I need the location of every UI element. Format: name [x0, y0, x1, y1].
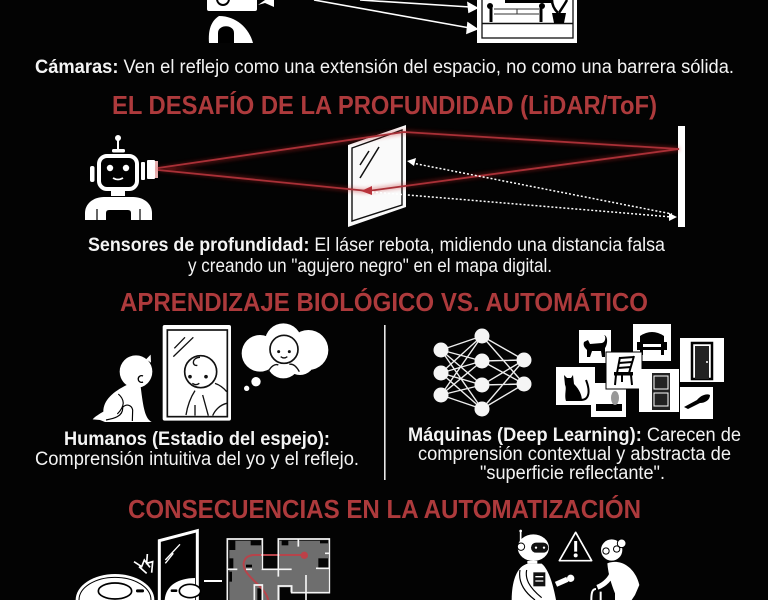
- text: cameras: Cámaras: Ven el reflejo como una extensión del espacio, no como una barrera sólida.: [35, 57, 734, 78]
- icon: mirror with baby reflection: [163, 325, 231, 421]
- icon: lidar robot: [85, 135, 158, 220]
- card: keys: [680, 387, 713, 419]
- dash between vacuum and map: [204, 580, 222, 582]
- card: chair: [606, 352, 642, 389]
- icon: thought cloud with baby: [242, 323, 328, 391]
- icon: floor map with black hole: [227, 539, 329, 600]
- icon: crawling baby: [93, 355, 152, 422]
- card: door: [680, 338, 724, 382]
- icon: robot vacuum hitting mirror: [76, 531, 201, 600]
- card: door panelled: [639, 369, 679, 412]
- icon: labelled training images: [556, 324, 724, 419]
- heading: consequences in automation: CONSECUENCIAS EN LA AUTOMATIZACIÓN: [128, 494, 641, 524]
- panel: cameras: [35, 0, 734, 78]
- elderly person: [591, 539, 639, 600]
- icon: neural network: [434, 328, 532, 416]
- text: humans: [35, 429, 359, 470]
- text: machines: Máquinas (Deep Learning): Carecen de: [408, 425, 741, 446]
- panel: consequences: [76, 530, 639, 600]
- icon: mirror: [348, 125, 406, 227]
- text: depth sensors: Sensores de profundidad: El láser rebota, midiendo una distancia falsa: [88, 235, 665, 256]
- text: machines: [408, 425, 741, 484]
- card: armchair: [633, 324, 671, 361]
- wall: [678, 126, 685, 227]
- heading: depth challenge: EL DESAFÍO DE LA PROFUNDIDAD (LiDAR/ToF): [112, 90, 657, 120]
- text: machines: comprensión contextual y abstracta de: [418, 444, 731, 465]
- icon: camera robot: [207, 0, 274, 43]
- red laser path: [158, 132, 679, 195]
- card: toy: [591, 383, 626, 417]
- panel: humans: [35, 323, 359, 470]
- text: depth sensors: y creando un "agujero negro" en el mapa digital.: [188, 256, 552, 277]
- heading: biological vs automatic learning: APRENDIZAJE BIOLÓGICO VS. AUTOMÁTICO: [120, 287, 648, 317]
- panel: machines: [408, 324, 741, 484]
- icon: robot assisting elder with warning: [512, 530, 639, 600]
- arrows: camera view through the reflection: [314, 0, 477, 33]
- card: cat sitting: [556, 367, 595, 405]
- text: machines: "superficie reflectante".: [480, 463, 665, 484]
- card: cat: [579, 330, 611, 363]
- warning triangle: [559, 532, 592, 561]
- panel: lidar diagram: [85, 125, 685, 277]
- red laser path glow: [158, 132, 679, 191]
- robot carer: [512, 530, 574, 600]
- text: depth sensors: [88, 235, 665, 277]
- text: humans: Comprensión intuitiva del yo y el reflejo.: [35, 449, 359, 470]
- icon: living room seen in mirror: [477, 0, 577, 43]
- text: humans: Humanos (Estadio del espejo):: [64, 429, 330, 450]
- dotted true distance arrows: [372, 158, 677, 221]
- divider: [384, 325, 386, 480]
